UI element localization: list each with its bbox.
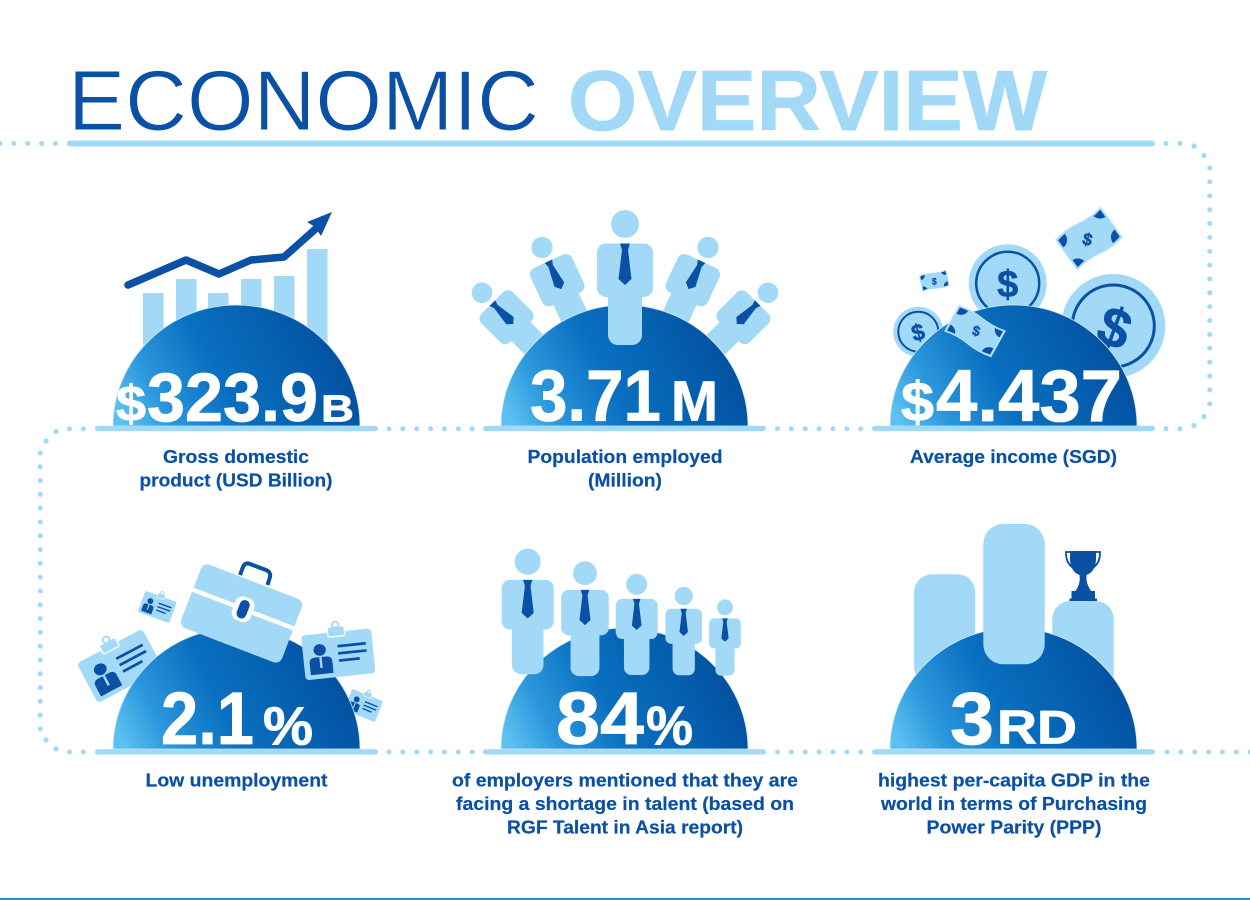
label [452,770,798,838]
title: ECONOMIC [68,54,539,149]
value: 3.71 [530,356,661,436]
icon: central employee [597,210,653,345]
title underline [67,140,1155,146]
base line [872,749,1155,755]
label: Average income (SGD) [910,446,1117,467]
icon: ID card on dome [300,618,376,680]
icon: trophy [1066,551,1100,601]
icon: coins and notes behind dome: $ [932,276,937,286]
value: 3 [950,677,994,760]
value: 2.1 [161,677,254,760]
icon: note on dome [935,296,1015,366]
value: M [671,370,718,434]
value: % [263,696,313,756]
label: Population employed [528,446,722,467]
value: $ [901,370,934,433]
dome [890,305,1137,426]
icon: rising bar chart [128,212,332,403]
label: RGF Talent in Asia report) [507,816,743,838]
value: B [321,388,354,430]
panel: population employed [459,210,791,490]
icon: briefcase [179,562,304,665]
icon: coins and notes behind dome: $ [908,318,928,346]
icon: coins and notes behind dome: $ [1089,293,1140,363]
panel: low unemployment [72,562,385,790]
label: Power Parity (PPP) [926,816,1102,838]
dome [890,628,1137,749]
icon: coins and notes behind dome: $ [1080,229,1095,250]
value: $ [116,376,146,432]
label: world in terms of Purchasing [880,793,1147,814]
value: 84 [556,677,644,760]
label: Low unemployment [146,770,328,790]
panel: gross domestic product [95,212,378,490]
dome [501,628,748,749]
dotted connector path [0,144,1250,752]
title [68,54,1048,149]
icon: note on dome: $ [970,322,982,339]
dome [501,305,748,426]
value [556,677,693,760]
label: product (USD Billion) [140,470,332,490]
value: % [646,694,693,756]
dome [113,305,360,426]
icon: coins and notes behind dome: $ [997,264,1018,306]
value: RD [997,700,1077,754]
label [878,770,1150,838]
label: facing a shortage in talent (based on [456,793,794,814]
base line [95,749,378,755]
label: highest per-capita GDP in the [878,770,1150,790]
icon: coins and notes behind dome [893,196,1165,378]
base line [483,426,766,431]
icon: fanned outer employees [459,228,791,376]
base line [95,426,378,431]
icon: ID cards outside dome [72,586,385,722]
value: 4.437 [936,356,1122,437]
footer rule [0,898,1250,900]
label: Gross domestic [163,446,309,467]
label [528,446,722,490]
label: (Million) [588,470,662,490]
icon: shrinking row of employees [502,549,741,676]
value [161,677,313,760]
base line [872,426,1155,431]
panel: talent shortage [452,549,798,838]
title: OVERVIEW [568,54,1048,149]
label: of employers mentioned that they are [452,770,798,790]
label [140,446,332,490]
panel: per-capita GDP rank [872,524,1155,838]
value [950,677,1077,760]
dome [113,628,360,749]
base line [483,749,766,755]
icon: tallest podium bar [983,524,1045,664]
icon: back podium bars [914,574,1114,691]
value: 323.9 [147,359,318,436]
panel: average income [872,196,1165,467]
